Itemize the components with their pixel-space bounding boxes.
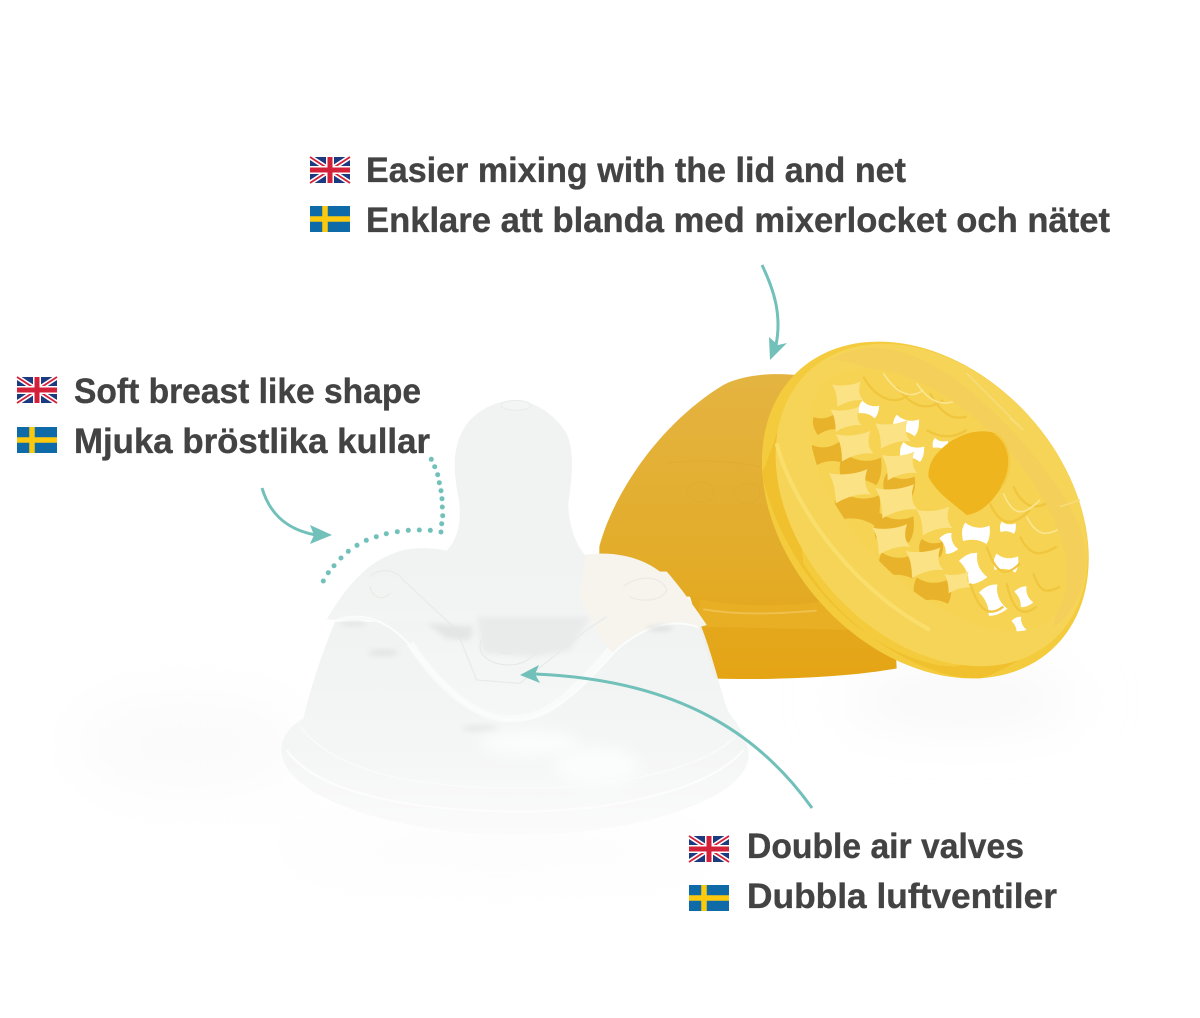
teat tip [501, 400, 531, 410]
net lattice [812, 373, 1060, 632]
Swedish label: shape: Mjuka bröstlika kullar [74, 422, 430, 461]
net ring [695, 276, 1155, 744]
teat creases [337, 571, 698, 720]
Swedish label: mixing: Enklare att blanda med mixerlocket och nätet [366, 201, 1110, 240]
ground shadow [70, 686, 1080, 866]
English label: shape: Soft breast like shape [74, 372, 421, 411]
icon: UK flag [17, 377, 57, 403]
product: yellow mixer lid and net [599, 342, 1089, 679]
icon: Swedish flag [17, 427, 57, 453]
arrow: to lid [762, 265, 787, 360]
dotted outline: breast shape [321, 457, 445, 584]
icon: Swedish flag [689, 885, 729, 911]
callout: breast shape [17, 372, 430, 461]
net knob [928, 431, 1009, 515]
callout: mixing [310, 151, 1110, 240]
teat nipple and wings [327, 400, 707, 720]
teat right wing highlight [580, 554, 707, 653]
yellow lid dome [599, 374, 897, 679]
teat shading [368, 649, 640, 787]
icon: UK flag [689, 836, 729, 862]
Swedish label: valves: Dubbla luftventiler [747, 877, 1057, 916]
teat base flange ring [287, 727, 743, 812]
net strands: top and right sections [863, 377, 1060, 612]
icon: UK flag [310, 157, 350, 183]
teat base dome [281, 622, 749, 835]
icon: Swedish flag [310, 206, 350, 232]
product: clear silicone teat [281, 400, 749, 835]
callout: air valves [689, 827, 1057, 916]
English label: mixing: Easier mixing with the lid and net [366, 151, 906, 190]
arrow: to air valves [520, 665, 812, 808]
arrow: to breast shape [262, 488, 332, 544]
English label: valves: Double air valves [747, 827, 1024, 866]
